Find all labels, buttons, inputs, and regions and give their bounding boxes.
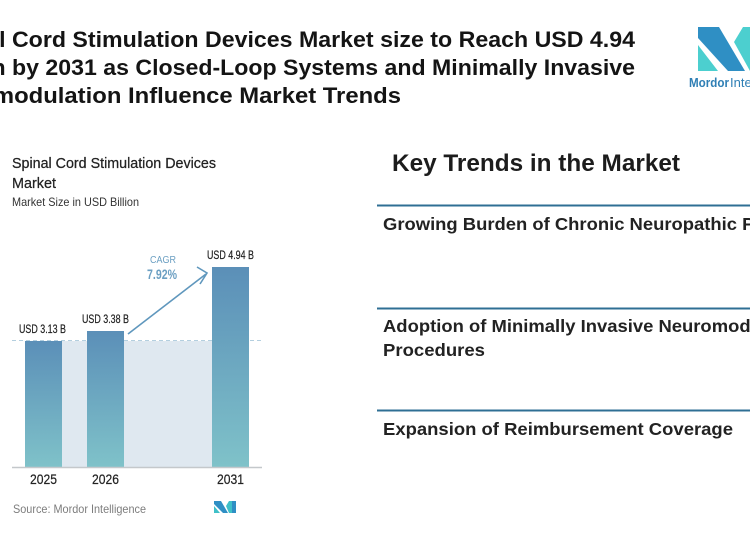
value labels <box>19 250 254 336</box>
value labels: USD 3.38 B <box>82 314 129 326</box>
value labels: USD 4.94 B <box>207 250 254 262</box>
logo: Mordor Intelligence: Mordor <box>689 75 729 90</box>
trend 2: Procedures <box>383 340 485 360</box>
chart title: Market <box>12 175 57 192</box>
bar: 2025 <box>25 341 62 467</box>
bar: 2026 <box>87 331 124 467</box>
bar chart <box>12 267 264 468</box>
trend 3: Expansion of Reimbursement Coverage <box>383 419 733 439</box>
year labels: 2031 <box>217 472 244 487</box>
year labels: 2025 <box>30 472 57 487</box>
title <box>0 27 636 108</box>
panel: key trends <box>377 150 750 439</box>
chart title: Spinal Cord Stimulation Devices <box>12 155 216 172</box>
CAGR label: 7.92% <box>147 267 177 282</box>
chart subtitle: Market Size in USD Billion <box>12 195 139 209</box>
year labels: 2026 <box>92 472 119 487</box>
heading: Key Trends in the Market <box>392 150 680 177</box>
CAGR label: CAGR <box>150 254 176 266</box>
trend 1: Growing Burden of Chronic Neuropathic Pain <box>383 214 750 234</box>
icon: small logo <box>214 501 236 513</box>
chart title <box>12 155 216 192</box>
year labels <box>30 472 244 487</box>
chart panel: market size <box>12 155 264 516</box>
value labels: USD 3.13 B <box>19 324 66 336</box>
bar: 2031 <box>212 267 249 467</box>
arrow: CAGR growth <box>128 267 207 334</box>
CAGR label <box>147 254 177 282</box>
trend 2 <box>377 308 750 360</box>
logo: Mordor Intelligence <box>689 27 750 90</box>
source: Source: Mordor Intelligence <box>13 502 146 516</box>
